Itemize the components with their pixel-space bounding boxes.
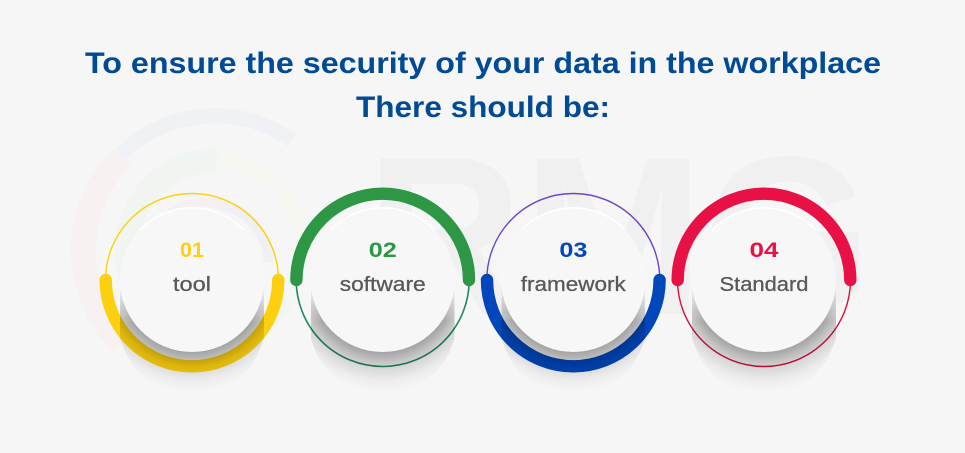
circle 02: software: [296, 194, 469, 395]
label framework: framework: [521, 274, 627, 296]
circle 04: Standard: [678, 194, 850, 395]
title: [85, 47, 881, 124]
title: There should be:: [356, 91, 610, 124]
watermark letters: RMG: [366, 109, 872, 362]
label software: software: [340, 274, 426, 296]
watermark logo: [83, 116, 300, 343]
number 02: 02: [369, 239, 397, 262]
circle 03: framework: [487, 194, 660, 395]
label Standard: Standard: [720, 274, 808, 296]
label tool: tool: [173, 274, 211, 296]
number 01: 01: [180, 239, 204, 262]
title: To ensure the security of your data in the workplace: [85, 47, 881, 80]
number 03: 03: [559, 239, 587, 262]
circle 01: tool: [106, 194, 278, 395]
number 04: 04: [750, 239, 779, 262]
